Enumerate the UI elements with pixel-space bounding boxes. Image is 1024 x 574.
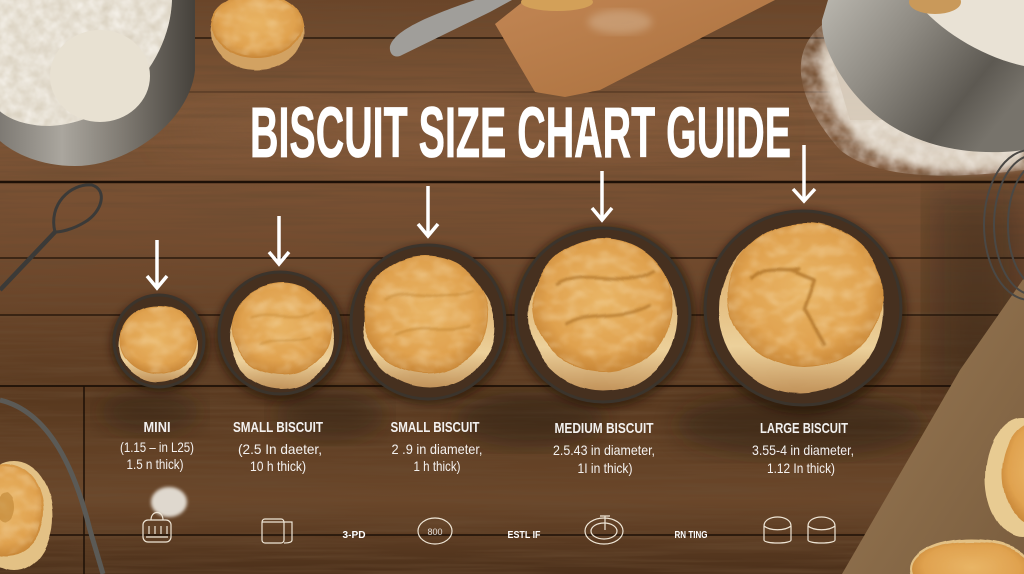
flour pile xyxy=(151,487,187,517)
icon: bowl 800: 800 xyxy=(427,527,443,537)
label: mini: MINI xyxy=(144,419,170,436)
whisk left xyxy=(0,185,101,290)
icon: bowl 800 xyxy=(418,518,452,544)
label: large biscuit xyxy=(752,420,854,476)
label: mini: 1.5 n thick) xyxy=(126,456,184,472)
label: mini: (1.15 – in L25) xyxy=(120,439,194,455)
label: small biscuit 2: 1 h thick) xyxy=(414,458,460,474)
label: large biscuit: 1.12 In thick) xyxy=(767,460,835,476)
top right mixing bowl xyxy=(822,0,1024,152)
biscuit ring 1: mini xyxy=(110,295,210,392)
icon: tin 1 xyxy=(764,517,791,543)
label: small biscuit 2 xyxy=(390,419,482,474)
label: large biscuit: LARGE BISCUIT xyxy=(760,420,848,437)
label: medium biscuit: 1I in thick) xyxy=(578,460,632,476)
biscuit bottom right xyxy=(986,418,1024,536)
icon: tin 2 xyxy=(808,517,835,543)
label: medium biscuit: MEDIUM BISCUIT xyxy=(554,420,654,437)
arrow 1 xyxy=(147,240,167,288)
label: mini xyxy=(120,419,194,472)
label: small biscuit 2: 2 .9 in diameter, xyxy=(392,441,482,457)
label: medium biscuit xyxy=(553,420,655,476)
arrow 3 xyxy=(418,186,438,236)
label: small biscuit 1 xyxy=(233,419,323,474)
scattered flour right xyxy=(801,25,1024,176)
caption: RN TING: RN TING xyxy=(674,530,708,541)
label: medium biscuit: 2.5.43 in diameter, xyxy=(553,442,655,458)
cutting board xyxy=(495,0,775,97)
biscuit ring 5: large xyxy=(701,210,907,414)
arrow 2 xyxy=(269,216,289,264)
caption: ESTL IF: ESTL IF xyxy=(508,530,540,541)
top left flour pot xyxy=(0,0,195,166)
biscuit ring 4: medium xyxy=(512,224,696,408)
biscuit bottom left xyxy=(0,461,53,571)
biscuit ring 2: small xyxy=(215,272,347,401)
caption: 3-PD: 3-PD xyxy=(342,530,366,541)
icon: roll xyxy=(262,519,292,543)
biscuit bottom centre right xyxy=(910,539,1024,574)
biscuit ring 3: small xyxy=(347,245,511,405)
knife xyxy=(390,0,512,56)
arrow 5 xyxy=(793,145,815,201)
whisk right xyxy=(984,150,1024,300)
icon: plate with stand xyxy=(585,516,623,544)
parchment paper xyxy=(842,278,1024,574)
label: small biscuit 2: SMALL BISCUIT xyxy=(390,419,480,436)
label: small biscuit 1: (2.5 In daeter, xyxy=(238,441,322,457)
arrow 4 xyxy=(592,171,612,220)
biscuit top xyxy=(210,0,304,70)
label: large biscuit: 3.55-4 in diameter, xyxy=(752,442,854,458)
label: small biscuit 1: SMALL BISCUIT xyxy=(233,419,323,436)
wire tool bottom left xyxy=(0,400,103,574)
label: small biscuit 1: 10 h thick) xyxy=(250,458,306,474)
icon: basket xyxy=(143,512,171,542)
